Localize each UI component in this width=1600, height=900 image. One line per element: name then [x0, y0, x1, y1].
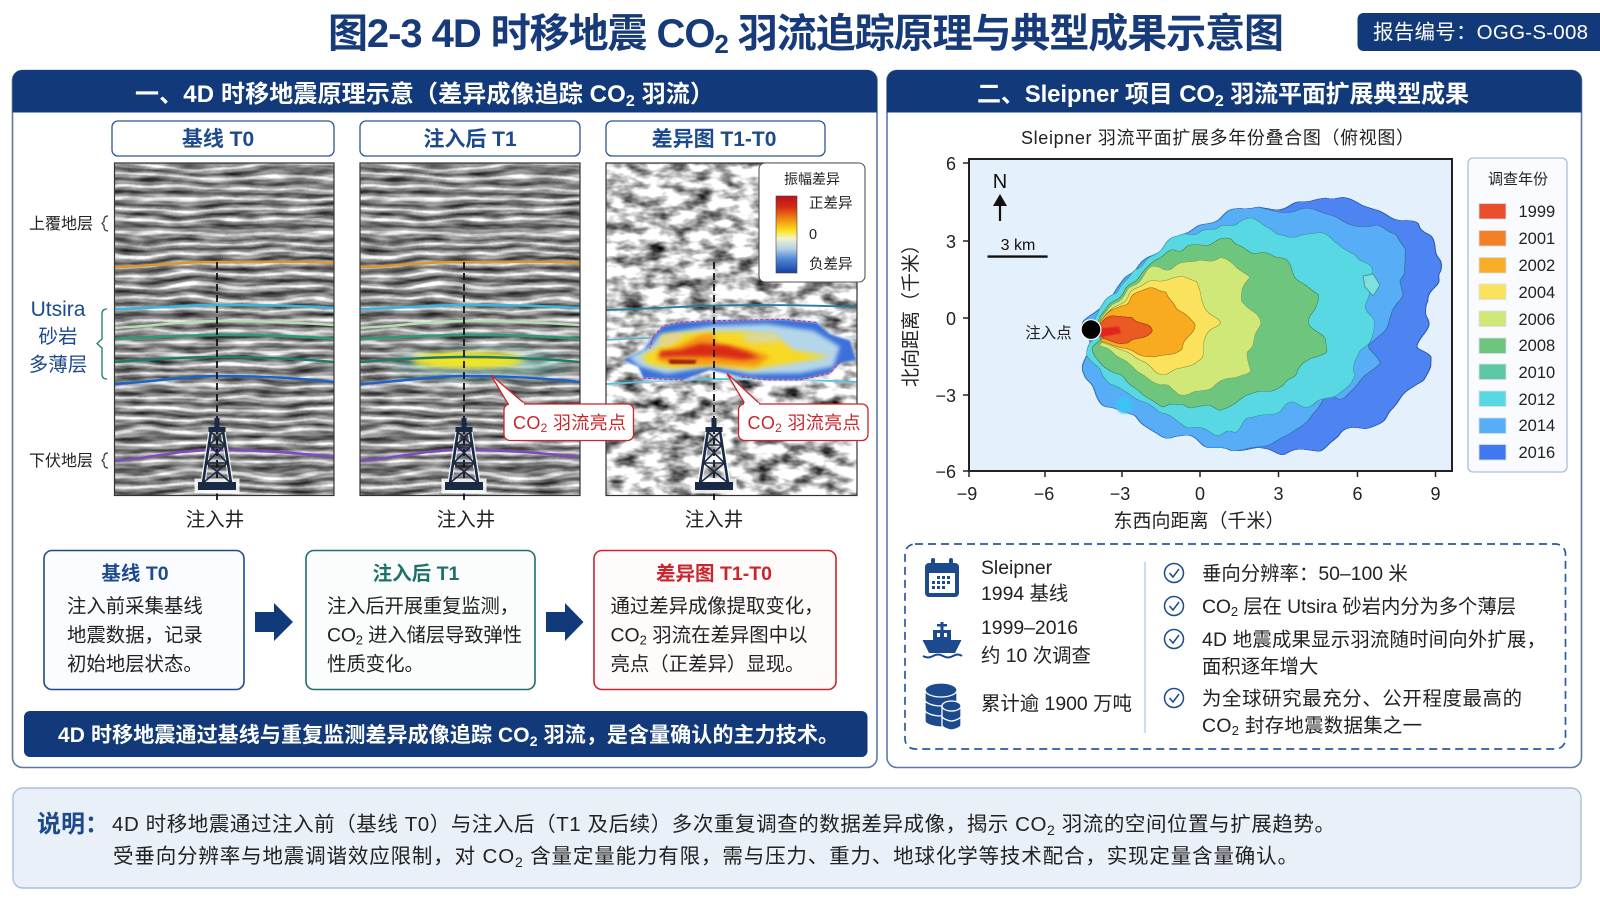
x axis: 0 — [1195, 484, 1205, 504]
title: 2 — [714, 29, 729, 59]
step box: difference: 差异图 T1-T0 — [656, 563, 772, 585]
north arrow: N — [993, 171, 1007, 193]
callout: CO2 bright spot difference — [727, 374, 868, 440]
icon: stacked coins — [925, 683, 961, 730]
x axis: −6 — [1034, 484, 1054, 504]
y axis — [900, 154, 969, 482]
well label 1: 注入井 — [186, 509, 244, 531]
check item: global dataset: CO — [1202, 715, 1231, 737]
panel header: Sleipner: 2 — [1215, 93, 1224, 110]
check item: thin layers: 2 — [1231, 604, 1238, 619]
note box: 4D 时移地震通过注入前（基线 T0）与注入后（T1 及后续）多次重复调查的数据差异成像，揭示 CO — [112, 813, 1046, 836]
layer label: Utsira sand: 多薄层 — [29, 354, 87, 376]
amplitude difference legend — [759, 163, 865, 282]
column label: difference map: 差异图 T1-T0 — [652, 128, 776, 151]
check item: global dataset: 2 — [1232, 723, 1239, 738]
text: cumulative mass: 累计逾 1900 万吨 — [981, 693, 1132, 715]
amplitude difference legend: 0 — [809, 227, 817, 243]
x axis — [957, 471, 1441, 532]
x axis: −9 — [957, 484, 977, 504]
step box: post-injection: 性质变化。 — [327, 654, 424, 676]
y axis: 6 — [946, 154, 956, 174]
amplitude difference legend: 负差异 — [809, 256, 852, 273]
year legend: 2014 — [1518, 417, 1555, 435]
check item: global dataset: 为全球研究最充分、公开程度最高的 — [1202, 688, 1522, 710]
callout: CO2 bright spot difference: 2 — [775, 421, 782, 435]
icon: derrick baseline — [197, 418, 237, 491]
check item: plume growth — [1164, 629, 1546, 678]
panel header: Sleipner: 羽流平面扩展典型成果 — [1224, 81, 1469, 108]
column label: difference map — [606, 121, 825, 156]
yellow CO2 bright anomaly — [392, 350, 568, 378]
callout: CO2 bright spot T1: CO — [513, 413, 540, 433]
year legend: 2001 — [1518, 230, 1555, 248]
panel header: principle — [12, 70, 877, 112]
well label 2: 注入井 — [437, 509, 495, 531]
arrow: step 2 to 3 — [546, 603, 584, 641]
takeaway banner: 羽流，是含量确认的主力技术。 — [538, 724, 839, 747]
layer label: overburden: 上覆地层 — [29, 215, 93, 233]
year legend: 2004 — [1518, 284, 1555, 302]
step box: post-injection: 进入储层导致弹性 — [363, 624, 522, 646]
year legend: 2012 — [1518, 391, 1555, 409]
panel: Sleipner plume result — [887, 70, 1582, 768]
injection point — [1025, 319, 1102, 342]
report number badge: 报告编号：OGG-S-008 — [1373, 21, 1588, 44]
north arrow — [993, 171, 1007, 221]
note box: 说明： — [37, 811, 109, 838]
x axis: −3 — [1110, 484, 1130, 504]
x axis: 3 — [1273, 484, 1284, 504]
callout: CO2 bright spot difference: 羽流亮点 — [782, 413, 860, 433]
column label: post-injection T1 — [360, 121, 580, 156]
check item: thin layers: CO — [1202, 596, 1231, 618]
takeaway banner: 2 — [530, 733, 538, 749]
check item: thin layers: 层在 Utsira 砂岩内分为多个薄层 — [1238, 596, 1516, 618]
facts box — [905, 544, 1566, 749]
icon: survey ship — [922, 622, 962, 658]
step box: post-injection: 注入后 T1 — [373, 563, 459, 585]
takeaway banner — [24, 711, 868, 757]
icon: derrick T1 — [444, 418, 484, 491]
note box: 受垂向分辨率与地震调谐效应限制，对 CO — [113, 845, 514, 868]
text: survey span: 约 10 次调查 — [981, 645, 1091, 667]
callout: CO2 bright spot difference: CO — [748, 413, 775, 433]
panel: 4D seismic principle — [12, 70, 877, 768]
panel header: principle: 一、4D 时移地震原理示意（差异成像追踪 CO — [135, 81, 626, 108]
step box: difference: 2 — [640, 632, 647, 648]
y axis: 3 — [946, 232, 956, 252]
panel header: Sleipner: 二、Sleipner 项目 CO — [977, 81, 1215, 108]
step box: post-injection — [306, 550, 535, 690]
seismic section: post-injection T1 — [359, 162, 581, 500]
callout: CO2 bright spot T1: 羽流亮点 — [548, 413, 626, 433]
takeaway banner: 4D 时移地震通过基线与重复监测差异成像追踪 CO — [58, 724, 530, 747]
step box: post-injection: 2 — [356, 632, 363, 648]
year legend: 1999 — [1518, 203, 1555, 221]
x axis: 东西向距离（千米） — [1113, 510, 1285, 532]
step box: baseline — [44, 550, 244, 690]
y axis: −3 — [935, 386, 956, 406]
panel header: principle: 2 — [626, 93, 635, 110]
note box: 2 — [515, 854, 523, 870]
year legend: 2010 — [1518, 364, 1555, 382]
well label 3: 注入井 — [685, 509, 743, 531]
callout: CO2 bright spot T1 — [491, 375, 634, 440]
year legend: 2006 — [1518, 311, 1555, 329]
x axis: 9 — [1430, 484, 1441, 504]
column label: baseline T0 — [112, 121, 334, 156]
text: Sleipner baseline: 1994 基线 — [981, 583, 1068, 605]
step box: post-injection: CO — [327, 624, 356, 646]
scale bar — [988, 237, 1048, 257]
step box: baseline: 初始地层状态。 — [67, 654, 203, 676]
year legend — [1468, 158, 1567, 472]
layer label: Utsira sand: Utsira — [31, 298, 86, 321]
step box: difference — [594, 550, 836, 690]
year legend: 2016 — [1518, 444, 1555, 462]
check item: plume growth: 4D 地震成果显示羽流随时间向外扩展， — [1202, 629, 1546, 651]
amplitude difference legend: 正差异 — [809, 195, 852, 212]
step box: difference: 亮点（正差异）显现。 — [610, 654, 804, 676]
seismic section: difference map — [606, 163, 858, 500]
icon: derrick difference — [694, 418, 734, 491]
year legend: 调查年份 — [1488, 171, 1548, 188]
note box: 羽流的空间位置与扩展趋势。 — [1055, 813, 1335, 836]
check item: plume growth: 面积逐年增大 — [1202, 656, 1318, 678]
check item: global dataset — [1164, 688, 1522, 738]
step box: post-injection: 注入后开展重复监测， — [327, 596, 519, 618]
title: 羽流追踪原理与典型成果示意图 — [728, 12, 1284, 56]
chart title: Sleipner 羽流平面扩展多年份叠合图（俯视图） — [1021, 128, 1414, 148]
CO2 plume difference anomaly — [620, 317, 858, 383]
year legend: 2008 — [1518, 337, 1555, 355]
y axis: 北向距离（千米） — [900, 235, 922, 387]
check item: global dataset: 封存地震数据集之一 — [1239, 715, 1422, 737]
step box: difference: 羽流在差异图中以 — [647, 624, 808, 646]
arrow: step 1 to 2 — [255, 603, 293, 641]
note box — [13, 788, 1581, 888]
scale bar: 3 km — [1001, 237, 1035, 254]
step box: baseline: 注入前采集基线 — [67, 596, 203, 618]
layer label: Utsira sand — [29, 298, 107, 379]
x axis: 6 — [1352, 484, 1363, 504]
report number badge — [1358, 13, 1600, 51]
column label: baseline T0: 基线 T0 — [182, 128, 254, 151]
panel header: Sleipner — [887, 70, 1582, 112]
step box: baseline: 基线 T0 — [101, 562, 169, 585]
icon: calendar — [925, 558, 959, 597]
layer label: underburden: 下伏地层 — [29, 452, 93, 470]
check item: vertical resolution: 垂向分辨率：50–100 米 — [1202, 563, 1408, 585]
step box: difference: 通过差异成像提取变化， — [610, 596, 824, 618]
note box: 含量定量能力有限，需与压力、重力、地球化学等技术配合，实现定量含量确认。 — [524, 845, 1298, 868]
step box: baseline: 地震数据，记录 — [67, 624, 203, 646]
map chart: plume plan view — [900, 154, 1452, 532]
note box: 2 — [1047, 822, 1055, 838]
y axis: −6 — [935, 462, 956, 482]
y axis: 0 — [946, 309, 956, 329]
title: 图2-3 4D 时移地震 CO — [328, 12, 715, 56]
step box: difference: CO — [610, 624, 640, 646]
text: Sleipner baseline: Sleipner — [981, 557, 1053, 579]
injection point: 注入点 — [1025, 324, 1072, 342]
layer label: Utsira sand: 砂岩 — [38, 326, 78, 348]
column label: post-injection T1: 注入后 T1 — [423, 128, 517, 151]
text: survey span — [981, 617, 1091, 667]
panel header: principle: 羽流） — [635, 81, 714, 108]
amplitude difference legend: 振幅差异 — [784, 171, 840, 187]
callout: CO2 bright spot T1: 2 — [541, 421, 548, 435]
year legend: 2002 — [1518, 257, 1555, 275]
text: survey span: 1999–2016 — [981, 617, 1078, 639]
plume contours — [1081, 195, 1442, 455]
text: Sleipner baseline — [981, 557, 1068, 605]
seismic section: baseline T0 — [114, 162, 335, 500]
